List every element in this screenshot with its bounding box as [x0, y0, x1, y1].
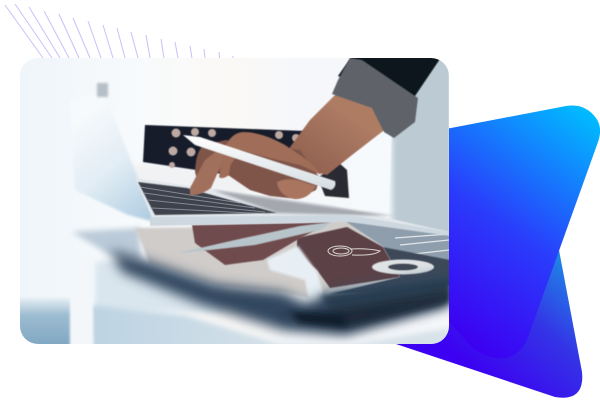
- sleeve: black shirt: [338, 58, 440, 96]
- tablet screen beige area: [135, 220, 400, 300]
- forearm: [288, 94, 392, 175]
- pen reflection: [178, 222, 332, 253]
- shape: front blue rounded triangle: [430, 106, 600, 358]
- photo card: hand on laptop with tablet: [10, 56, 450, 354]
- stylus pen: [183, 135, 336, 190]
- tablet left grey edge: [72, 228, 140, 262]
- laptop front edge: [150, 215, 450, 236]
- foreground floor centre: [92, 304, 449, 344]
- foreground floor left: [20, 298, 72, 344]
- tablet right dark surface lower: [318, 279, 449, 318]
- brown tablet panel: [297, 227, 400, 288]
- hand reflection: [192, 222, 330, 265]
- sleeve cuff: [332, 58, 418, 138]
- tablet darkest front edge: [280, 292, 449, 328]
- tablet right keys panel: [345, 221, 450, 262]
- middle finger: [219, 132, 322, 178]
- thumb: [277, 179, 316, 199]
- ring finger and back of hand: [195, 140, 320, 199]
- decorative hatch lines top-left: [5, 4, 233, 58]
- photo background: [20, 58, 449, 344]
- keyboard: [138, 182, 277, 215]
- tablet right dark surface: [330, 247, 450, 294]
- laptop screen: [75, 124, 152, 222]
- concentric arcs on tablet: [328, 246, 380, 256]
- right wall: [388, 58, 449, 240]
- index finger: [190, 152, 224, 196]
- white blurred column: [68, 299, 94, 344]
- lower desk haze: [95, 262, 225, 312]
- tablet darkest spot: [290, 312, 345, 326]
- dark chair back: [143, 125, 349, 198]
- laptop deck: [136, 178, 447, 232]
- white reflection: [266, 244, 324, 300]
- shape: back blue triangle: [396, 250, 582, 398]
- trackpad: [213, 190, 395, 216]
- tablet body dark band: [110, 250, 450, 335]
- hand and fingers: [190, 132, 322, 199]
- ring chart on tablet: [372, 260, 434, 274]
